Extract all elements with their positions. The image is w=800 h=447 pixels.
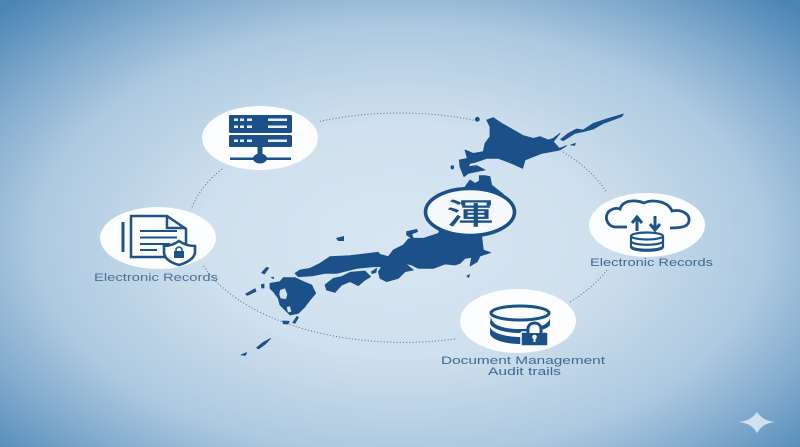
- icon: server rack: [229, 115, 292, 164]
- label: audit trails: Audit trails: [488, 366, 562, 378]
- node: server: [202, 106, 318, 170]
- dotted orbit ring: [192, 113, 607, 342]
- label: electronic records left: Electronic Records: [94, 272, 219, 284]
- icon: cloud with database: [606, 201, 689, 251]
- label: document management: Document Management: [441, 355, 605, 367]
- node: cloud storage: [589, 193, 705, 257]
- map of Japan: [241, 114, 623, 355]
- Kyushu bays: [279, 288, 291, 312]
- icon: document with shield: [123, 216, 195, 265]
- Honshu: [295, 176, 510, 282]
- kanji badge: 渾: [447, 199, 493, 231]
- northern and Izu islets: [336, 236, 470, 278]
- node: electronic records document: [100, 207, 216, 269]
- icon: sparkle: [738, 412, 776, 433]
- Hokkaido: [459, 118, 567, 177]
- Kyushu: [270, 278, 316, 315]
- Shikoku: [325, 268, 377, 292]
- kanji badge: [426, 188, 514, 236]
- icon: database with lock: [490, 306, 550, 346]
- small islands: [241, 267, 298, 355]
- label: electronic records right: Electronic Records: [590, 257, 714, 269]
- node: secured database: [460, 289, 576, 353]
- Kuril islands: [451, 114, 623, 169]
